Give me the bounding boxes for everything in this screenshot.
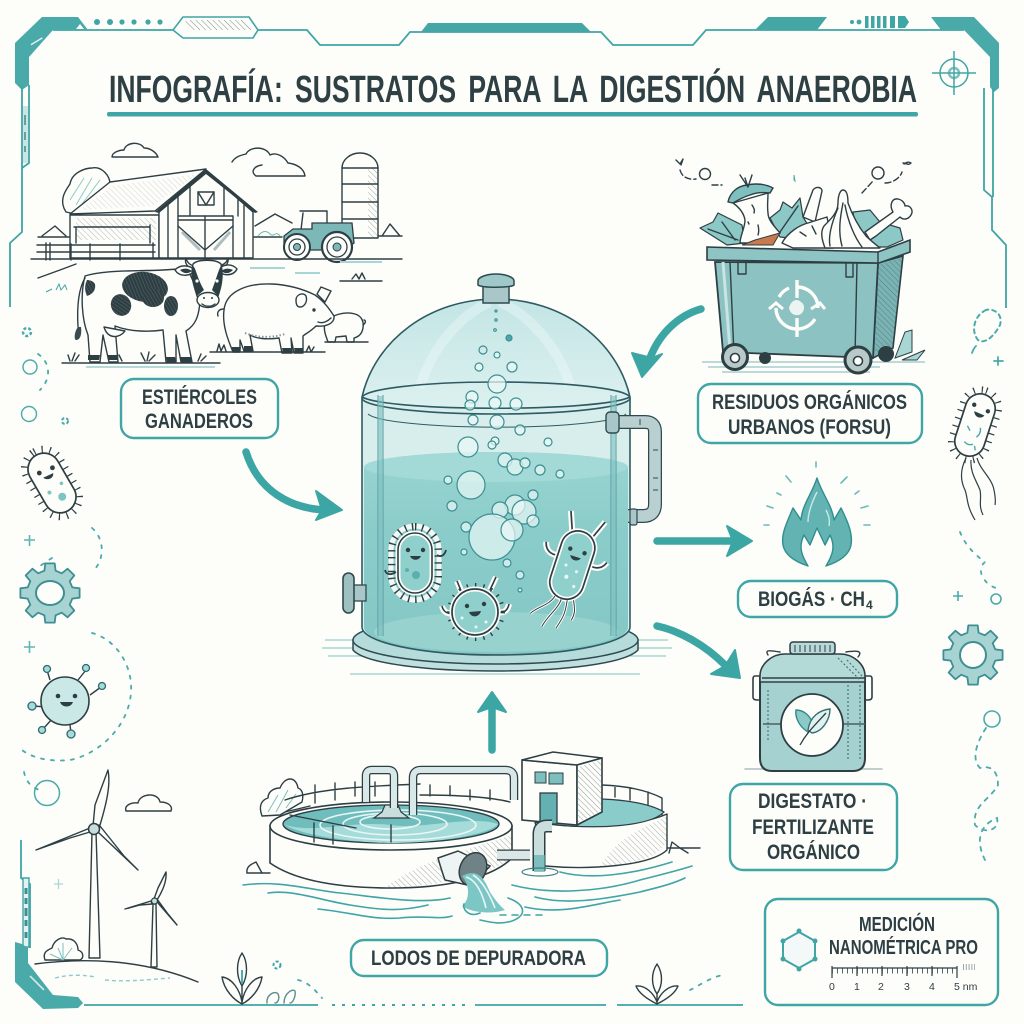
water (364, 452, 628, 655)
icon: round microbe (28, 664, 106, 738)
tree (63, 168, 110, 215)
label: Biogás CH4 (738, 581, 897, 617)
tractor (284, 211, 354, 262)
plant sprouts (222, 953, 725, 1004)
icon: biogas flame (764, 462, 870, 566)
carrot stick (803, 187, 822, 222)
label: Biogás CH4: BIOGÁS · CH (758, 588, 865, 611)
label: Biogás CH4: 4 (866, 598, 873, 612)
middle leaves (770, 198, 808, 238)
white scraps (782, 217, 833, 248)
water ripples (243, 862, 692, 923)
dome (362, 299, 630, 408)
scale ruler: 4 (929, 981, 935, 993)
vertical pipe and connector (497, 826, 558, 876)
icon: recycling target (769, 280, 825, 337)
overflow pipe (606, 412, 658, 525)
rim (707, 240, 910, 263)
right leaf clump (853, 210, 903, 247)
small leaves at foot (895, 330, 925, 360)
barn (70, 169, 258, 258)
bone (865, 199, 912, 240)
label: Residuos orgánicos urbanos: URBANOS (FORSU) (728, 416, 891, 439)
outlet pipe and water fall (438, 848, 505, 913)
label: Digestato fertilizante orgánico: DIGESTATO · (758, 790, 867, 813)
pig (210, 284, 334, 353)
glass body (362, 398, 630, 655)
panel: urban organic waste bin (676, 159, 925, 373)
microbe centre (442, 577, 509, 639)
cow (62, 258, 237, 367)
fence (37, 243, 155, 260)
scale ruler: 3 (904, 981, 910, 993)
panel: digester tank (322, 274, 672, 674)
bushes (247, 779, 688, 873)
fence (285, 782, 662, 815)
label: Digestato fertilizante orgánico: ORGÁNICO (767, 841, 860, 864)
icon: left bacterium (18, 442, 86, 524)
label: Estiércoles ganaderos: ESTIÉRCOLES (142, 386, 257, 409)
orange peel (742, 233, 780, 245)
pump house (522, 752, 602, 825)
microbe right (521, 507, 619, 640)
arrow: sludge to digester (478, 692, 506, 750)
title underline (107, 112, 918, 116)
bush (44, 938, 83, 960)
dome knob (478, 274, 514, 303)
scale ruler: 2 (878, 981, 884, 993)
side panel (873, 256, 903, 358)
scale ruler (829, 966, 978, 993)
waste pile (700, 175, 912, 248)
wheels (722, 344, 894, 373)
base sketch lines (322, 640, 672, 674)
panel: wastewater treatment plant (243, 752, 700, 923)
left basin (270, 802, 512, 888)
front panel (715, 262, 878, 358)
icon: crosshair target (932, 51, 976, 95)
overhead pipes (366, 770, 514, 815)
icon: left gear (20, 563, 80, 623)
scale ruler: 1 (854, 981, 860, 993)
silo (342, 153, 378, 238)
scale ruler: 5 nm (954, 981, 978, 993)
piglet (324, 313, 368, 342)
panel: farm scene (livestock manure) (31, 143, 402, 367)
icon: leaf badge (781, 694, 843, 756)
panel: Medición nanométrica pro (765, 899, 998, 1005)
right margin doodles (953, 310, 1003, 860)
small turbine (151, 904, 157, 967)
panel: Medición nanométrica pro: NANOMÉTRICA PRO (829, 936, 978, 959)
clouds (112, 143, 305, 176)
icon: hexagon (780, 928, 818, 972)
banana peel (822, 190, 880, 248)
horizon hills (38, 214, 402, 237)
illustration: wind turbines (35, 770, 198, 982)
hill (35, 961, 198, 982)
label: Residuos orgánicos urbanos (698, 384, 922, 443)
label: Digestato fertilizante orgánico (730, 784, 897, 870)
apple core (733, 193, 780, 243)
grass marks (38, 262, 382, 292)
ground (702, 362, 925, 372)
icon: right gear (943, 625, 1003, 685)
icon: right bacterium (947, 385, 1003, 520)
left margin doodles (22, 328, 131, 806)
icon: digestate tank (745, 642, 882, 771)
side valve (343, 573, 366, 613)
base plate (353, 640, 638, 671)
right basin (535, 799, 667, 867)
rim ellipse and walls (362, 382, 630, 655)
microbe left (385, 526, 446, 600)
label: Lodos de depuradora: LODOS DE DEPURADORA (371, 947, 586, 970)
cloud (126, 795, 171, 811)
big turbine (89, 832, 100, 958)
label: Lodos de depuradora (351, 940, 607, 976)
panel: Medición nanométrica pro: MEDICIÓN (859, 912, 935, 936)
arrow: urban waste to digester (632, 309, 701, 377)
label: Digestato fertilizante orgánico: FERTILIZANTE (752, 816, 874, 839)
scale ruler: 0 (829, 981, 835, 993)
arrow: manure to digester (246, 452, 342, 520)
ground line (31, 258, 402, 260)
arrow: digester to biogas (657, 526, 752, 556)
arrow: digester to digestate (657, 626, 740, 678)
dashed doodles (676, 159, 911, 193)
label: Residuos orgánicos urbanos: RESIDUOS ORGÁNICOS (712, 391, 907, 414)
bubbles (444, 310, 564, 592)
left leaves (700, 213, 745, 245)
label: Estiércoles ganaderos: GANADEROS (145, 410, 253, 433)
label: Estiércoles ganaderos (121, 379, 278, 438)
